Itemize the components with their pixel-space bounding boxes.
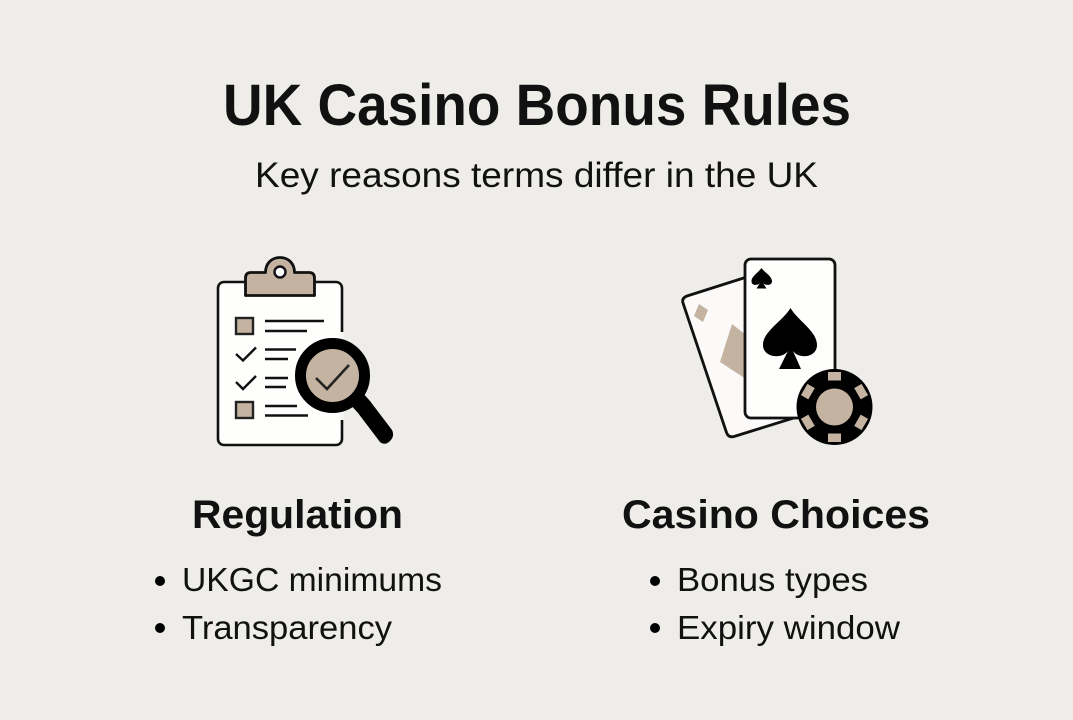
bullet list: casino choices: Bonus types bbox=[677, 561, 868, 598]
panel: casino choices bbox=[622, 259, 930, 646]
panel: regulation bbox=[155, 258, 442, 646]
clipboard edge gap around lens bbox=[340, 332, 344, 420]
bullet list: regulation: Transparency bbox=[182, 609, 393, 646]
back card diamonds bbox=[694, 304, 708, 322]
back card bbox=[683, 276, 800, 437]
large spade bbox=[763, 308, 817, 369]
bullet list: casino choices: Expiry window bbox=[677, 609, 900, 646]
bullet list: regulation: UKGC minimums bbox=[182, 561, 442, 598]
heading: casino choices: Casino Choices bbox=[622, 493, 930, 537]
clipboard board bbox=[218, 282, 342, 445]
subtitle: Key reasons terms differ in the UK bbox=[255, 156, 818, 195]
checklist items bbox=[236, 318, 324, 418]
poker chip bbox=[796, 369, 872, 445]
icon: clipboard with magnifying glass bbox=[218, 258, 393, 445]
magnifying glass bbox=[300, 344, 393, 444]
icon: playing cards and chip bbox=[683, 259, 872, 445]
title: UK Casino Bonus Rules bbox=[223, 73, 851, 138]
small spade bbox=[752, 268, 772, 288]
bullet list: casino choices bbox=[650, 561, 900, 646]
front card bbox=[745, 259, 835, 418]
heading: regulation: Regulation bbox=[192, 493, 403, 537]
bullet list: regulation bbox=[155, 561, 442, 646]
clipboard clip bbox=[246, 258, 314, 296]
